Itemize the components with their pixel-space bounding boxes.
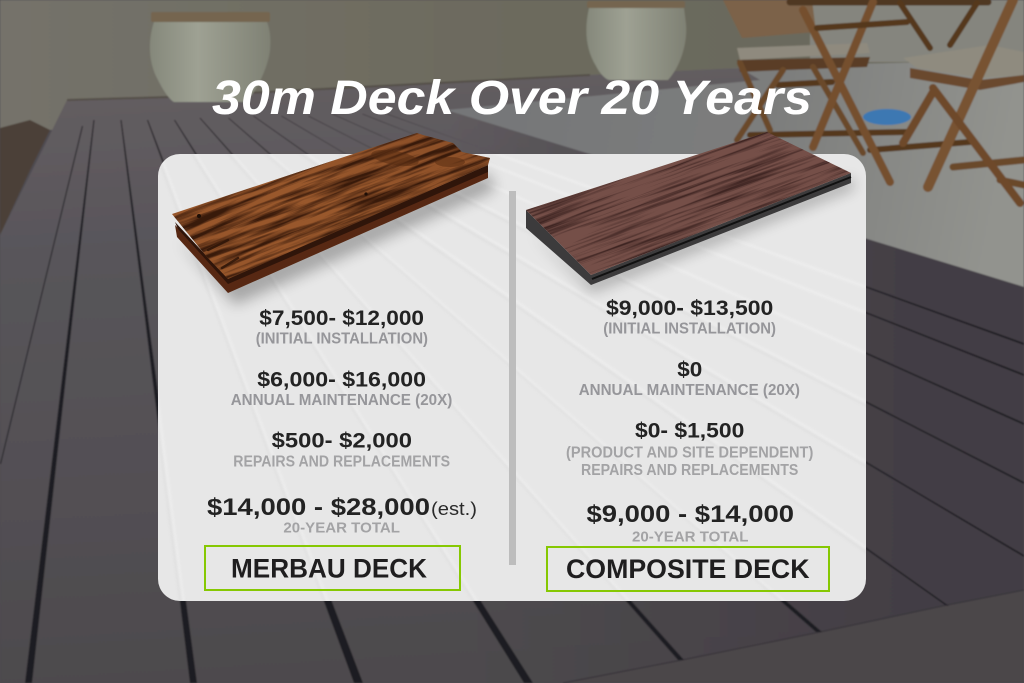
chair one cushion xyxy=(737,43,870,60)
panel: merbau column xyxy=(172,133,500,591)
gap xyxy=(175,165,488,284)
stone paving xyxy=(446,60,1024,287)
panel: comparison card xyxy=(158,132,866,601)
pot right xyxy=(586,1,686,80)
right deck shade xyxy=(300,110,1024,683)
twenty year total: (est.) xyxy=(431,499,477,519)
label: composite deck xyxy=(547,547,829,591)
repairs cost xyxy=(233,430,450,471)
chair two low bar xyxy=(953,160,1024,185)
chair one back xyxy=(723,0,816,38)
annual maintenance cost: ANNUAL MAINTENANCE (20X) xyxy=(579,382,800,399)
chair two seat xyxy=(910,68,1024,90)
repairs cost: (PRODUCT AND SITE DEPENDENT) xyxy=(566,444,813,461)
back edge line xyxy=(67,75,590,100)
repairs cost: REPAIRS AND REPLACEMENTS xyxy=(581,462,798,479)
repairs cost: $500- $2,000 xyxy=(272,430,412,453)
twenty year total: $14,000 - $28,000 xyxy=(207,494,430,521)
border board edge xyxy=(563,590,1024,683)
panel: composite column xyxy=(526,132,859,592)
label: merbau deck xyxy=(205,546,460,590)
repairs cost xyxy=(566,420,813,479)
top board xyxy=(172,133,490,279)
blue object xyxy=(863,109,911,125)
label: composite deck: COMPOSITE DECK xyxy=(566,554,810,584)
title: 30m Deck Over 20 Years xyxy=(212,72,812,125)
initial installation cost: $7,500- $12,000 xyxy=(259,307,424,330)
twenty year total xyxy=(586,501,794,546)
card background xyxy=(158,154,866,601)
wood grain xyxy=(174,133,490,278)
chair two legs xyxy=(928,0,1013,187)
initial installation cost: (INITIAL INSTALLATION) xyxy=(603,320,776,337)
initial installation cost xyxy=(256,307,428,347)
lower board xyxy=(175,168,488,293)
annual maintenance cost xyxy=(579,359,800,399)
composite grain xyxy=(526,132,848,273)
groove xyxy=(592,177,851,279)
label: merbau deck: MERBAU DECK xyxy=(231,554,427,584)
annual maintenance cost: ANNUAL MAINTENANCE (20X) xyxy=(231,392,452,409)
repairs cost: REPAIRS AND REPLACEMENTS xyxy=(233,454,450,471)
bottom right border board xyxy=(563,590,1024,683)
twenty year total: 20-YEAR TOTAL xyxy=(283,520,400,537)
chair one seat xyxy=(737,57,870,72)
chair one legs xyxy=(737,63,863,153)
divider xyxy=(509,191,516,565)
table legs xyxy=(803,2,890,182)
chair two cushion xyxy=(903,45,1024,78)
initial installation cost: $9,000- $13,500 xyxy=(606,297,773,320)
annual maintenance cost: $0 xyxy=(677,359,702,382)
table and chairs xyxy=(723,0,1024,203)
icon: composite plank xyxy=(526,132,859,297)
annual maintenance cost: $6,000- $16,000 xyxy=(257,369,426,392)
top face xyxy=(526,132,851,275)
ghost deck lines through card xyxy=(162,161,164,164)
ghost deck shadows through card xyxy=(118,118,1021,683)
table top xyxy=(790,0,988,6)
initial installation cost xyxy=(603,297,776,337)
plank shadow xyxy=(530,178,855,292)
shrub xyxy=(0,120,50,235)
twenty year total: 20-YEAR TOTAL xyxy=(632,529,748,546)
side face xyxy=(526,173,851,285)
chair one low bars xyxy=(750,82,970,150)
repairs cost: $0- $1,500 xyxy=(635,420,744,443)
light wall behind table xyxy=(810,0,1024,62)
twenty year total xyxy=(207,494,477,537)
icon: merbau plank xyxy=(172,133,500,310)
twenty year total: $9,000 - $14,000 xyxy=(586,501,794,528)
initial installation cost: (INITIAL INSTALLATION) xyxy=(256,330,428,347)
wall xyxy=(0,0,1024,130)
pot left xyxy=(150,12,270,102)
annual maintenance cost xyxy=(231,369,452,409)
plank shadow xyxy=(178,172,495,305)
